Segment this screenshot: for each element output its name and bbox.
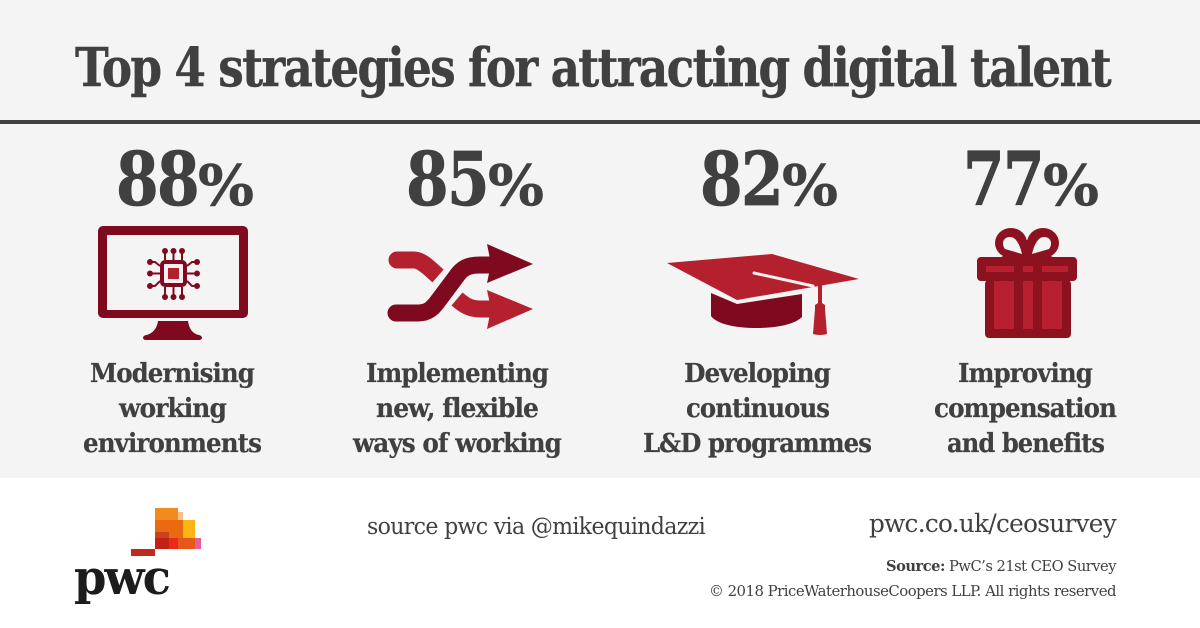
label: developing continuous L&D programmes: L&D programmes bbox=[643, 429, 871, 459]
label: modernising working environments: working bbox=[118, 394, 227, 424]
icon: monitor with chip bbox=[98, 226, 248, 340]
statistic: 85%: 85 bbox=[406, 137, 488, 223]
column: implementing flexible ways of working bbox=[352, 137, 562, 459]
label: developing continuous L&D programmes: continuous bbox=[686, 394, 829, 424]
website link: pwc.co.uk/ceosurvey bbox=[869, 509, 1118, 538]
statistic: 85%: % bbox=[488, 153, 544, 219]
label: developing continuous L&D programmes bbox=[643, 359, 871, 459]
logo: pwc bbox=[74, 508, 201, 606]
statistic: 82%: % bbox=[782, 153, 838, 219]
copyright note: © 2018 PriceWaterhouseCoopers LLP. All rights reserved bbox=[709, 582, 1117, 600]
statistic: 82%: 82 bbox=[700, 137, 782, 223]
icon: shuffle arrows bbox=[388, 244, 533, 329]
statistic: 88%: % bbox=[198, 153, 254, 219]
icon: graduation cap bbox=[667, 254, 859, 335]
column: improving compensation and benefits bbox=[934, 137, 1117, 459]
label: modernising working environments bbox=[83, 359, 261, 459]
label: implementing new flexible ways of working bbox=[352, 359, 562, 459]
logo: pwc: pwc bbox=[74, 550, 170, 606]
label: developing continuous L&D programmes: Developing bbox=[684, 359, 831, 389]
column: modernising working environments bbox=[83, 137, 261, 459]
label: modernising working environments: environments bbox=[83, 429, 261, 459]
source note: Source: PwC’s 21st CEO Survey bbox=[886, 557, 1117, 575]
column: developing continuous L&D programmes bbox=[643, 137, 871, 459]
label: implementing new flexible ways of working: ways of working bbox=[352, 429, 562, 459]
statistic: 77%: 77 bbox=[963, 137, 1043, 223]
label: implementing new flexible ways of working: Implementing bbox=[366, 359, 549, 389]
icon: gift box bbox=[977, 228, 1077, 338]
statistic: 77%: % bbox=[1043, 153, 1099, 219]
label: modernising working environments: Modernising bbox=[90, 359, 255, 389]
label: improving compensation and benefits: and benefits bbox=[947, 429, 1104, 459]
label: improving compensation and benefits: compensation bbox=[934, 394, 1117, 424]
label: improving compensation and benefits: Improving bbox=[958, 359, 1093, 389]
label: implementing new flexible ways of working: new, flexible bbox=[376, 394, 538, 424]
label: improving compensation and benefits bbox=[934, 359, 1117, 459]
source credit: source pwc via @mikequindazzi bbox=[367, 514, 705, 540]
statistic: 88%: 88 bbox=[116, 137, 198, 223]
